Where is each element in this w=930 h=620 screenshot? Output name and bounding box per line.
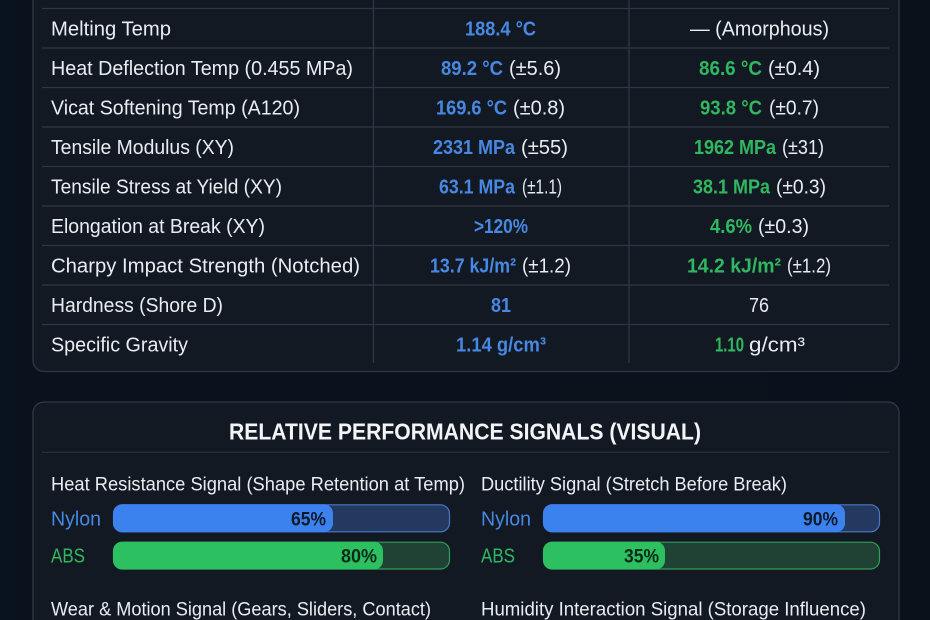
row: charpy impact strength: (±1.2) xyxy=(787,256,831,278)
row: charpy impact strength: (±1.2) xyxy=(522,256,571,278)
row: hardness: 81 xyxy=(491,295,511,317)
row: vicat softening temp xyxy=(51,98,819,120)
row: specific gravity: g/cm³ xyxy=(749,334,805,356)
chart: ductility signal: Ductility Signal (Stretch Before Break) xyxy=(481,474,787,496)
row: melting temp: Melting Temp xyxy=(51,18,171,40)
chart: ductility signal: 35% xyxy=(624,546,659,568)
row: tensile stress at yield xyxy=(51,176,826,198)
row: tensile stress at yield: Tensile Stress at Yield (XY) xyxy=(51,176,282,198)
chart: heat resistance signal: 80% xyxy=(341,546,377,568)
row: heat deflection temp: (±0.4) xyxy=(768,58,820,80)
row: tensile modulus: 1962 MPa xyxy=(694,137,777,159)
row: hardness: Hardness (Shore D) xyxy=(51,295,223,317)
row: heat deflection temp: 89.2 °C xyxy=(441,58,503,80)
chart: ductility signal xyxy=(481,474,880,570)
row: tensile stress at yield: 38.1 MPa xyxy=(693,176,771,198)
row: charpy impact strength: 13.7 kJ/m² xyxy=(430,256,516,278)
row: charpy impact strength xyxy=(51,256,831,278)
row: tensile stress at yield: (±0.3) xyxy=(776,176,826,198)
row: heat deflection temp xyxy=(51,58,820,80)
row: charpy impact strength: 14.2 kJ/m² xyxy=(687,256,781,278)
row: specific gravity: Specific Gravity xyxy=(51,334,188,356)
chart: heat resistance signal: 65% xyxy=(291,510,326,531)
row: tensile modulus: Tensile Modulus (XY) xyxy=(51,137,234,159)
panel: properties table xyxy=(33,0,899,372)
row: specific gravity xyxy=(51,334,805,356)
chart: heat resistance signal: Nylon xyxy=(51,509,101,531)
chart: heat resistance signal: ABS xyxy=(51,546,85,568)
row: heat deflection temp: Heat Deflection Temp (0.455 MPa) xyxy=(51,58,353,80)
row: elongation at break: (±0.3) xyxy=(758,216,809,238)
row: specific gravity: 1.10 xyxy=(715,334,744,356)
row: vicat softening temp: 169.6 °C xyxy=(436,98,507,120)
row: vicat softening temp: (±0.7) xyxy=(769,98,819,120)
chart: ductility signal: 90% xyxy=(803,510,838,531)
row: vicat softening temp: Vicat Softening Temp (A120) xyxy=(51,98,300,120)
row: tensile stress at yield: 63.1 MPa xyxy=(439,176,516,198)
row: elongation at break: 4.6% xyxy=(710,216,752,238)
panel: relative performance signals xyxy=(33,402,899,620)
row: melting temp: — (Amorphous) xyxy=(690,18,829,40)
row: hardness: 76 xyxy=(749,295,769,317)
row: specific gravity: 1.14 g/cm³ xyxy=(456,334,546,356)
row: melting temp xyxy=(51,18,829,40)
row: elongation at break xyxy=(51,216,809,238)
row: charpy impact strength: Charpy Impact Strength (Notched) xyxy=(51,256,360,278)
row: hardness xyxy=(51,295,769,317)
row: heat deflection temp: (±5.6) xyxy=(509,58,561,80)
row: tensile modulus: (±31) xyxy=(782,137,824,159)
row: elongation at break: Elongation at Break (XY) xyxy=(51,216,265,238)
row: vicat softening temp: 93.8 °C xyxy=(700,98,762,120)
heading: RELATIVE PERFORMANCE SIGNALS (VISUAL) xyxy=(229,418,701,444)
row: melting temp: 188.4 °C xyxy=(465,18,536,40)
chart: ductility signal: Nylon xyxy=(481,509,531,531)
row: vicat softening temp: (±0.8) xyxy=(513,98,565,120)
row: elongation at break: >120% xyxy=(474,216,528,238)
chart: ductility signal: ABS xyxy=(481,546,515,568)
row: tensile modulus xyxy=(51,137,824,159)
row: heat deflection temp: 86.6 °C xyxy=(699,58,762,80)
row: tensile stress at yield: (±1.1) xyxy=(522,176,562,198)
chart: heat resistance signal xyxy=(51,474,465,570)
row: tensile modulus: 2331 MPa xyxy=(433,137,516,159)
chart: heat resistance signal: Heat Resistance Signal (Shape Retention at Temp) xyxy=(51,474,465,496)
row: tensile modulus: (±55) xyxy=(521,137,568,159)
